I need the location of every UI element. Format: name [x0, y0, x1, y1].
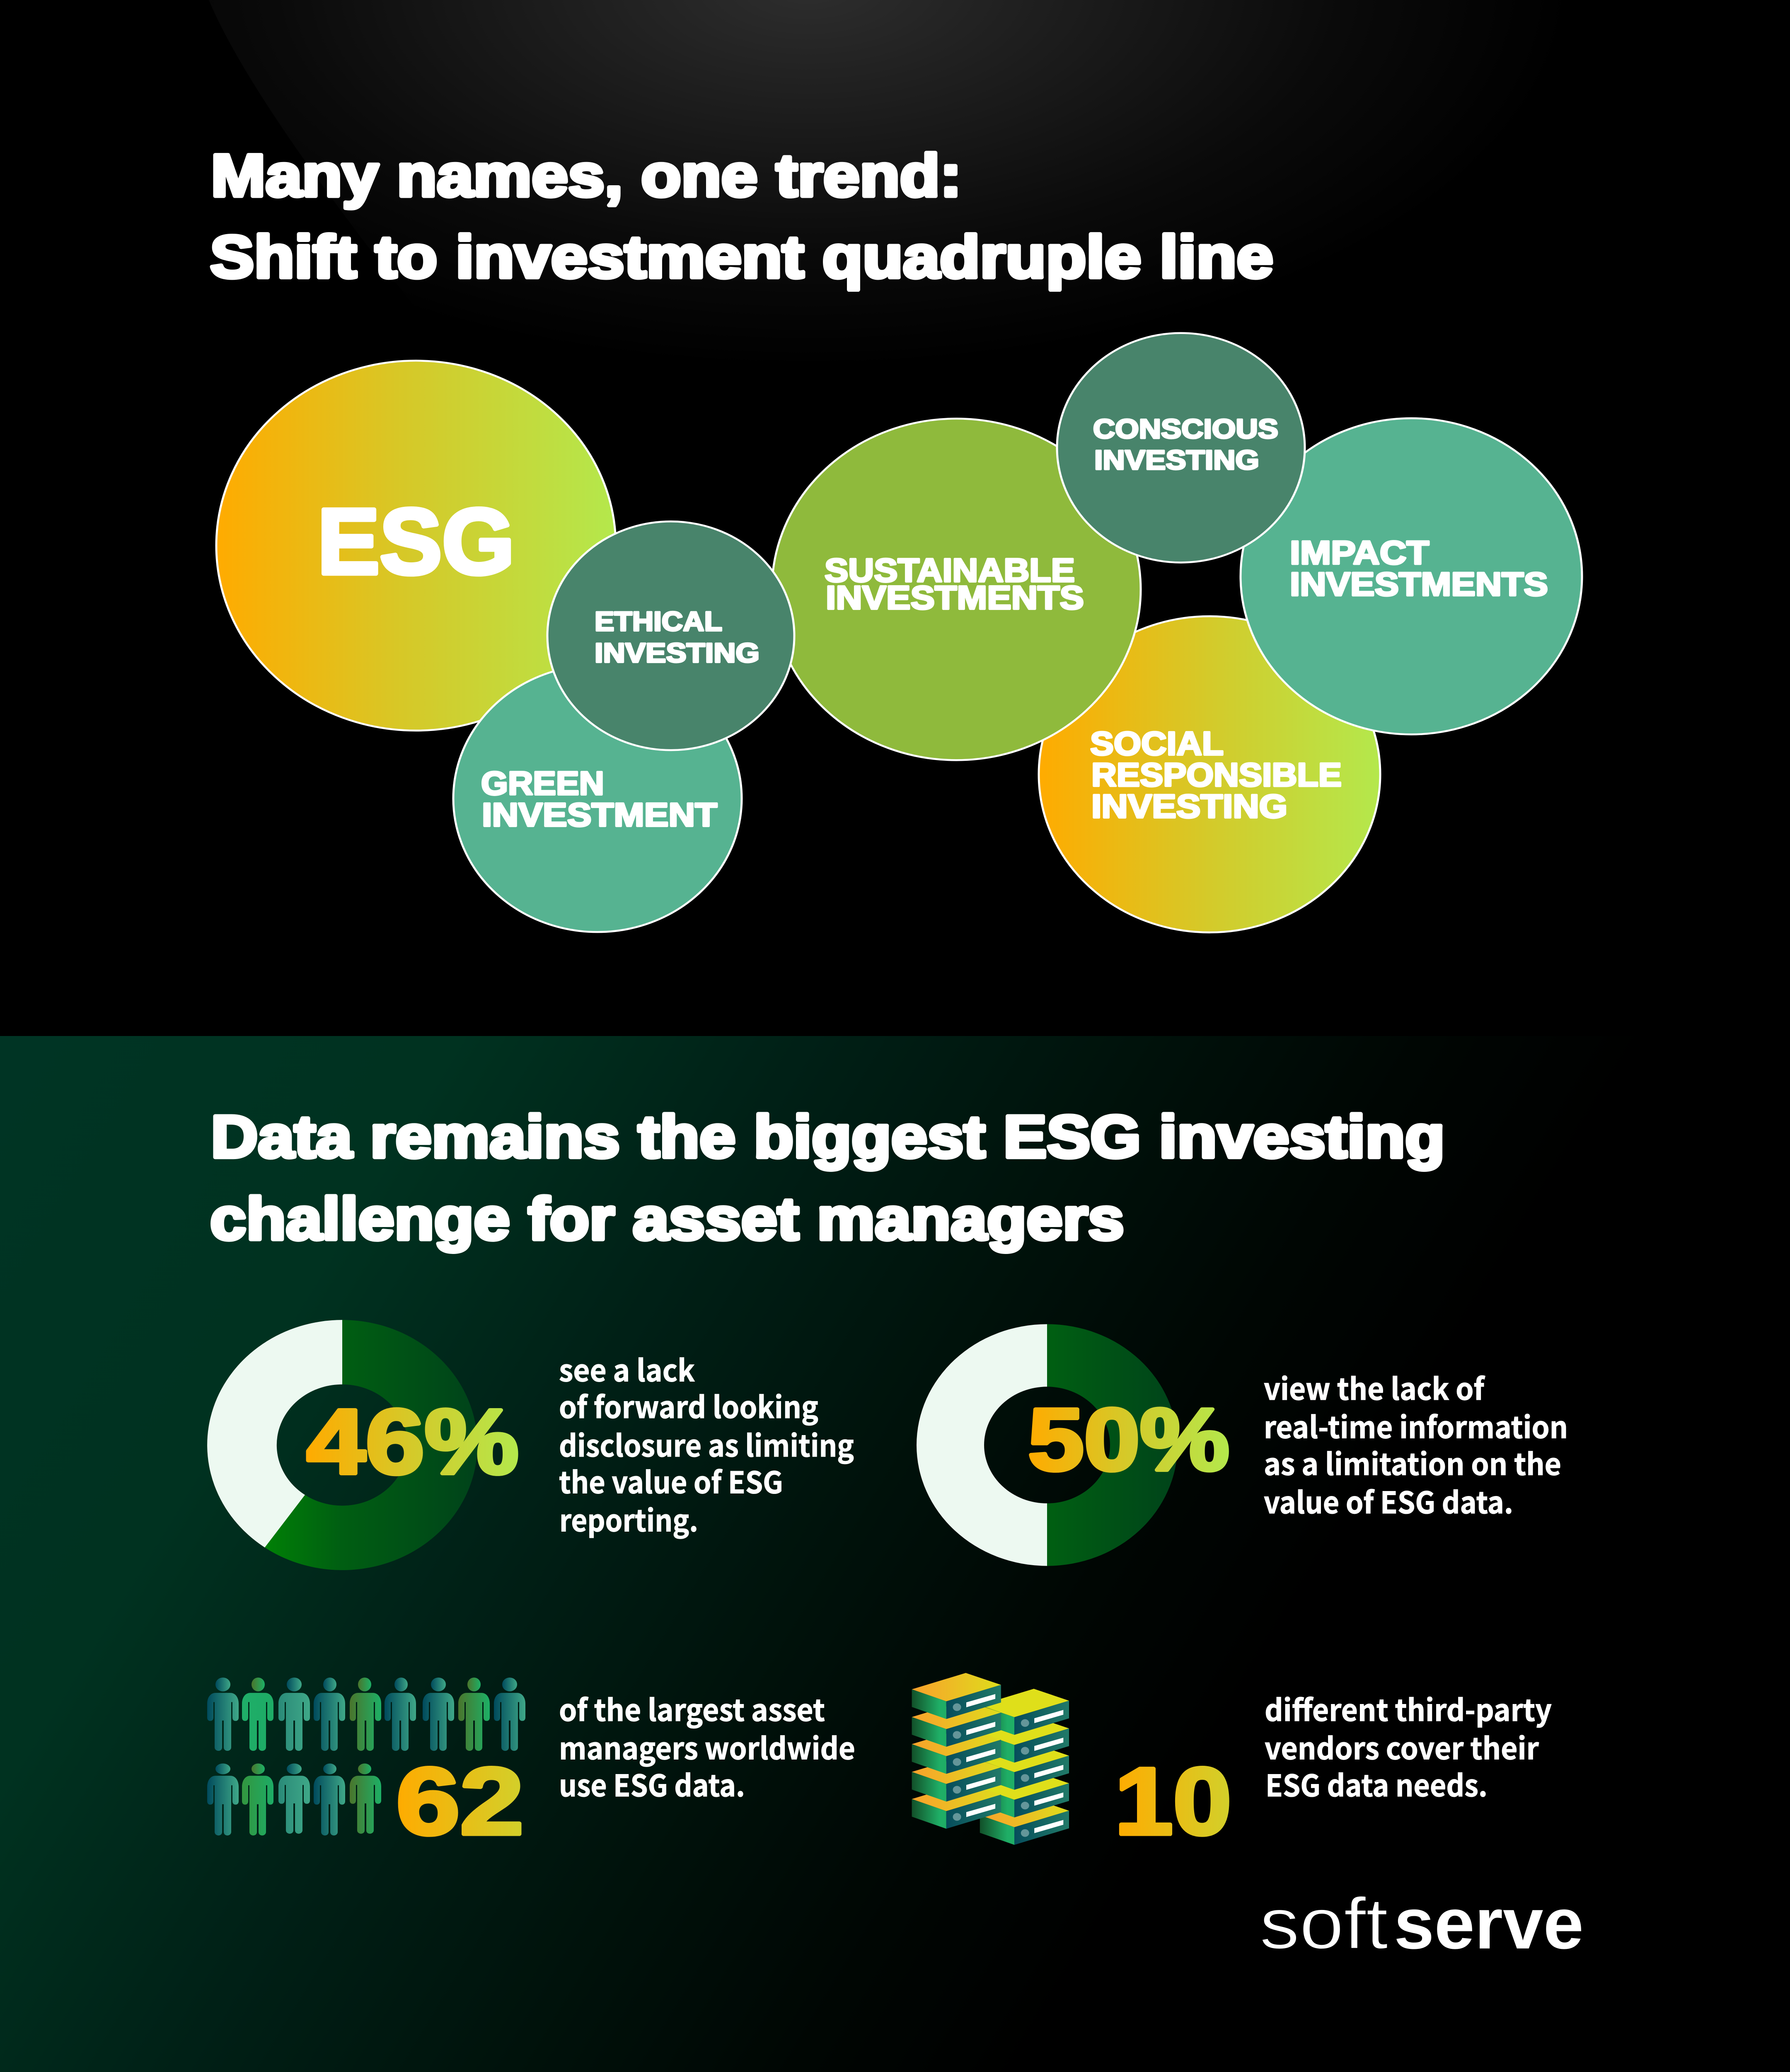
logo: softserve: soft	[1260, 1883, 1388, 1964]
text: third-party vendors: ESG data needs.	[1265, 1762, 1488, 1805]
panel: many names background	[0, 0, 1790, 1036]
bubble: social responsible investing	[1039, 616, 1380, 932]
text: real-time information: real-time information	[1264, 1404, 1568, 1447]
bubble: conscious investing	[1057, 333, 1305, 562]
icon: server stacks	[912, 1673, 1069, 1845]
text: real-time information: value of ESG data.	[1264, 1479, 1513, 1522]
title: data challenge	[210, 1103, 1445, 1252]
text: forward looking disclosure: of forward looking	[559, 1384, 818, 1427]
bubble: green investment: INVESTMENT	[482, 796, 717, 833]
bubble: ethical investing	[547, 521, 794, 750]
text: third-party vendors: different third-party	[1265, 1686, 1552, 1730]
bubble: impact investments: INVESTMENTS	[1290, 566, 1548, 603]
panel: data challenge background	[0, 1036, 1790, 2072]
bubble: social responsible investing: INVESTING	[1091, 788, 1287, 825]
bubble: ethical investing: ETHICAL	[595, 607, 722, 637]
bubble: ethical investing: INVESTING	[595, 638, 760, 668]
bubble: esg	[216, 361, 616, 731]
text: real-time information: as a limitation on the	[1264, 1440, 1561, 1484]
donut chart: 50 percent: 50%	[1028, 1390, 1229, 1489]
bubble: social responsible investing: RESPONSIBLE	[1091, 756, 1342, 794]
text: forward looking disclosure	[559, 1347, 854, 1540]
bubble: sustainable investments: INVESTMENTS	[826, 579, 1084, 616]
text: largest asset managers	[559, 1686, 855, 1805]
number: 62: 62	[396, 1748, 524, 1854]
bubble: sustainable investments	[772, 419, 1141, 760]
logo: softserve: serve	[1394, 1883, 1584, 1964]
text: real-time information	[1264, 1365, 1568, 1522]
text: third-party vendors: vendors cover their	[1265, 1725, 1539, 1768]
donut chart: 46 percent	[207, 1320, 519, 1570]
bubble: sustainable investments: SUSTAINABLE	[825, 552, 1075, 589]
bubble: green investment: GREEN	[481, 765, 604, 802]
bubble: esg: ESG	[317, 489, 515, 593]
title: data challenge: Data remains the biggest ESG investing	[211, 1103, 1445, 1170]
title: many names: Shift to investment quadruple line	[210, 223, 1273, 290]
text: largest asset managers: use ESG data.	[559, 1762, 745, 1805]
text: largest asset managers: of the largest asset	[559, 1686, 825, 1730]
bubble: impact investments	[1241, 418, 1582, 734]
title: many names	[210, 142, 1273, 290]
text: forward looking disclosure: disclosure as limiting	[559, 1422, 854, 1465]
text: forward looking disclosure: see a lack	[559, 1347, 695, 1390]
text: largest asset managers: managers worldwide	[559, 1725, 855, 1768]
title: many names: Many names, one trend:	[211, 142, 962, 209]
number: 10: 10	[1115, 1748, 1231, 1854]
bubble: conscious investing: CONSCIOUS	[1093, 414, 1278, 444]
text: forward looking disclosure: the value of ESG	[559, 1459, 783, 1502]
icon: people rows	[207, 1677, 525, 1835]
text: real-time information: view the lack of	[1264, 1365, 1485, 1409]
logo: softserve	[1260, 1883, 1584, 1964]
bubble: impact investments: IMPACT	[1290, 534, 1429, 571]
text: third-party vendors	[1265, 1686, 1552, 1805]
donut chart: 50 percent	[917, 1324, 1229, 1566]
bubble: green investment	[453, 665, 742, 932]
title: data challenge: challenge for asset managers	[210, 1185, 1124, 1252]
text: forward looking disclosure: reporting.	[559, 1497, 698, 1540]
bubble: conscious investing: INVESTING	[1094, 445, 1259, 475]
donut chart: 46 percent: 46%	[307, 1391, 519, 1493]
bubble: social responsible investing: SOCIAL	[1090, 725, 1224, 762]
